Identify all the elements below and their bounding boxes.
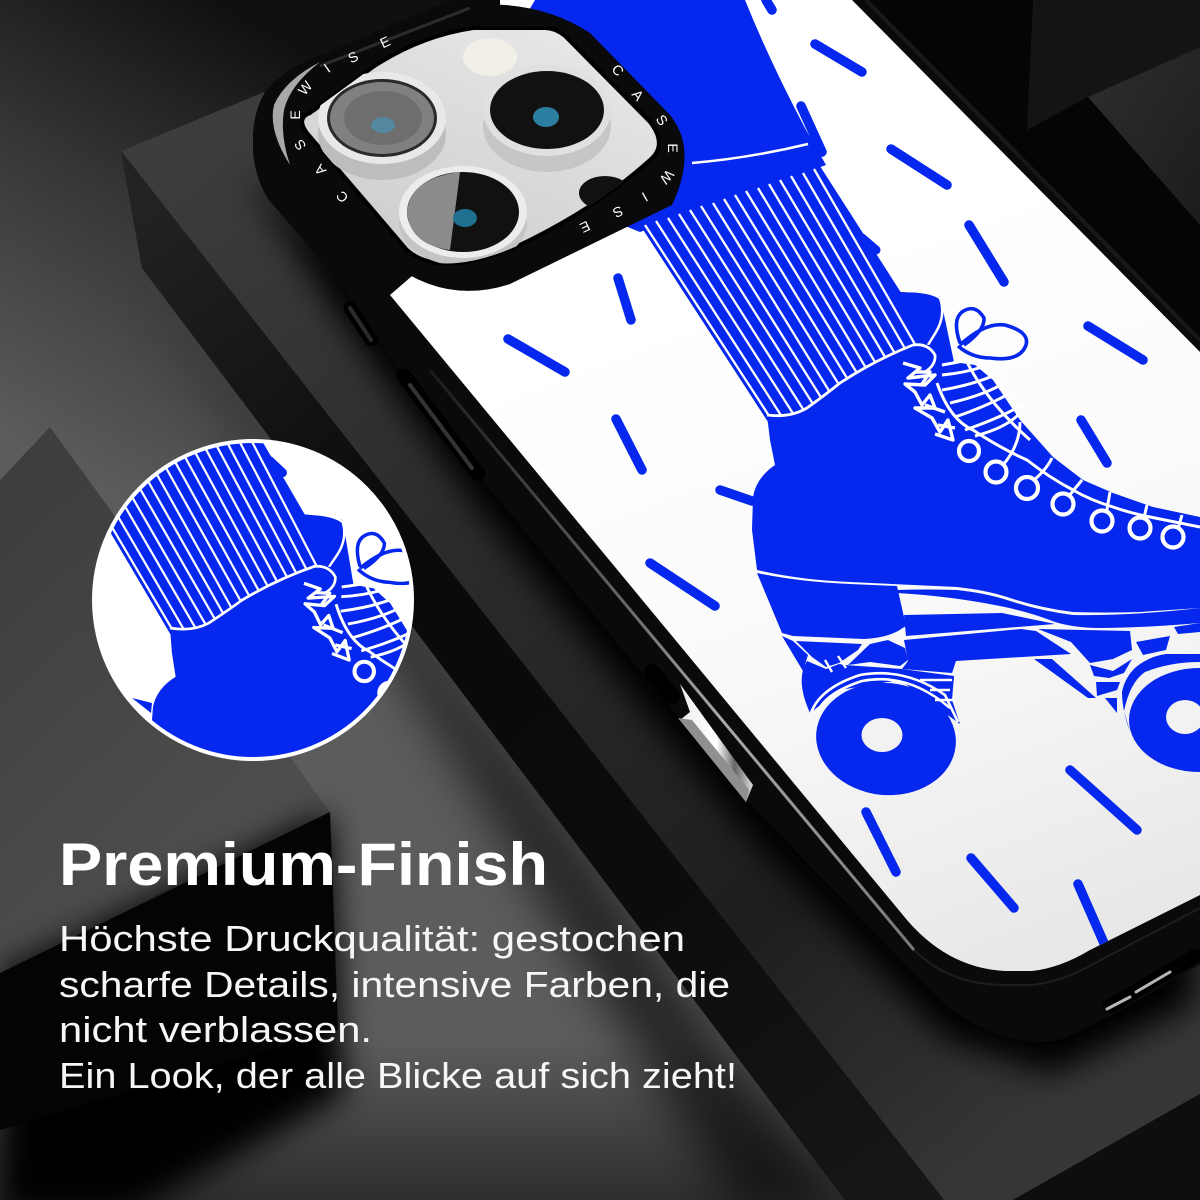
side buttons	[350, 308, 672, 696]
ring band	[320, 8, 470, 66]
body text: scharfe Details, intensive Farben, die	[59, 964, 730, 1005]
casewise ring text: E	[377, 33, 393, 51]
casewise ring text: S	[345, 48, 361, 66]
body text: Höchste Druckqualität: gestochen	[59, 918, 685, 959]
camera glass	[302, 28, 659, 263]
casewise ring text: I	[321, 60, 333, 76]
dashes	[508, 0, 1143, 950]
phone screen with roller skate artwork	[390, 0, 1200, 971]
lens: bottom	[399, 166, 527, 266]
casewise ring text: C	[333, 188, 351, 206]
casewise ring text: W	[656, 167, 677, 188]
casewise ring text: A	[629, 86, 648, 104]
casewise ring text: S	[653, 112, 671, 128]
body text	[59, 918, 737, 1096]
phone case	[253, 0, 1200, 1042]
casewise ring text: S	[610, 203, 626, 221]
casewise ring text: I	[639, 189, 651, 205]
body text: Ein Look, der alle Blicke auf sich zieht!	[59, 1055, 737, 1096]
casewise ring text: E	[665, 143, 681, 153]
casewise ring text: E	[577, 218, 593, 236]
phone shadow	[247, 174, 1194, 1074]
heading: Premium-Finish	[59, 831, 548, 898]
flash	[463, 38, 517, 76]
casewise ring text: W	[295, 77, 316, 98]
lidar sensor	[579, 176, 624, 206]
casewise ring text: E	[287, 110, 303, 120]
casewise ring text	[287, 33, 681, 236]
casewise ring text: A	[310, 161, 329, 179]
charging port	[1107, 956, 1195, 1009]
lens: left	[318, 72, 446, 180]
casewise ring text: S	[291, 137, 309, 153]
magnifier circle	[92, 439, 414, 761]
body text: nicht verblassen.	[59, 1009, 372, 1050]
casewise ring text: C	[609, 61, 627, 79]
roller skate	[500, 0, 1200, 802]
lens: right	[483, 64, 611, 172]
chrome side button	[680, 684, 753, 802]
camera bump	[273, 4, 685, 291]
